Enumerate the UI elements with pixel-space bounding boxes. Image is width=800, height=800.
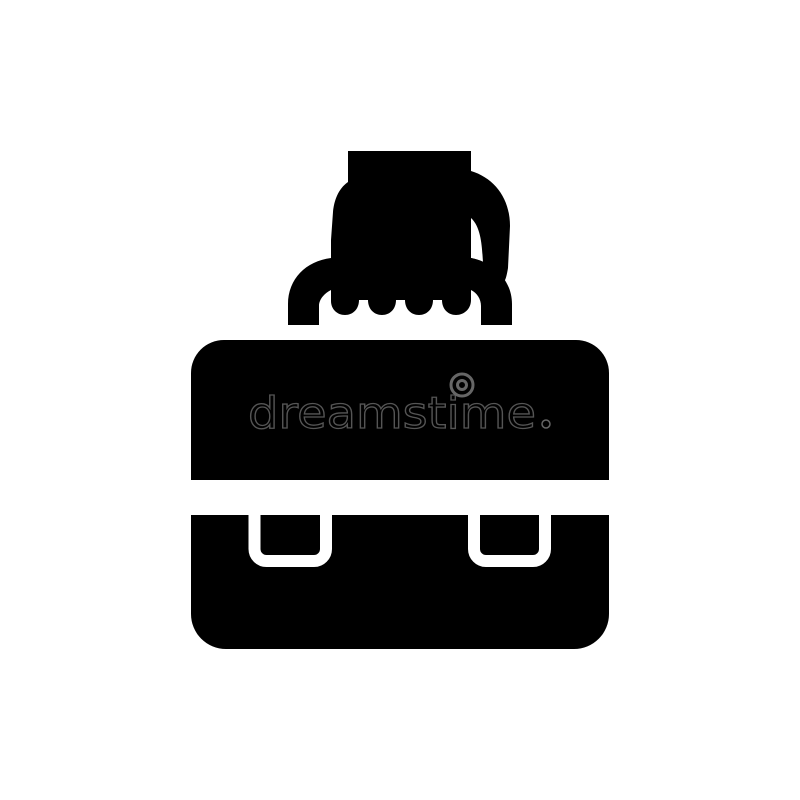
icon: sleeve cuff xyxy=(348,151,471,191)
icon: thumb xyxy=(470,171,510,290)
watermark text: dreamstime xyxy=(248,388,536,439)
icon: briefcase upper body xyxy=(191,340,609,480)
icon: right clasp xyxy=(474,515,545,561)
watermark logo xyxy=(248,374,550,439)
icon: left clasp xyxy=(254,515,326,561)
watermark registered mark xyxy=(542,420,550,428)
icon: hand with knuckles xyxy=(331,160,471,315)
icon: briefcase handle xyxy=(288,258,512,325)
watermark spiral xyxy=(451,374,473,396)
icon: hand holding briefcase handle xyxy=(288,151,512,325)
icon: briefcase lower body with clasps xyxy=(191,515,609,649)
icon: lower body panel xyxy=(191,515,609,649)
